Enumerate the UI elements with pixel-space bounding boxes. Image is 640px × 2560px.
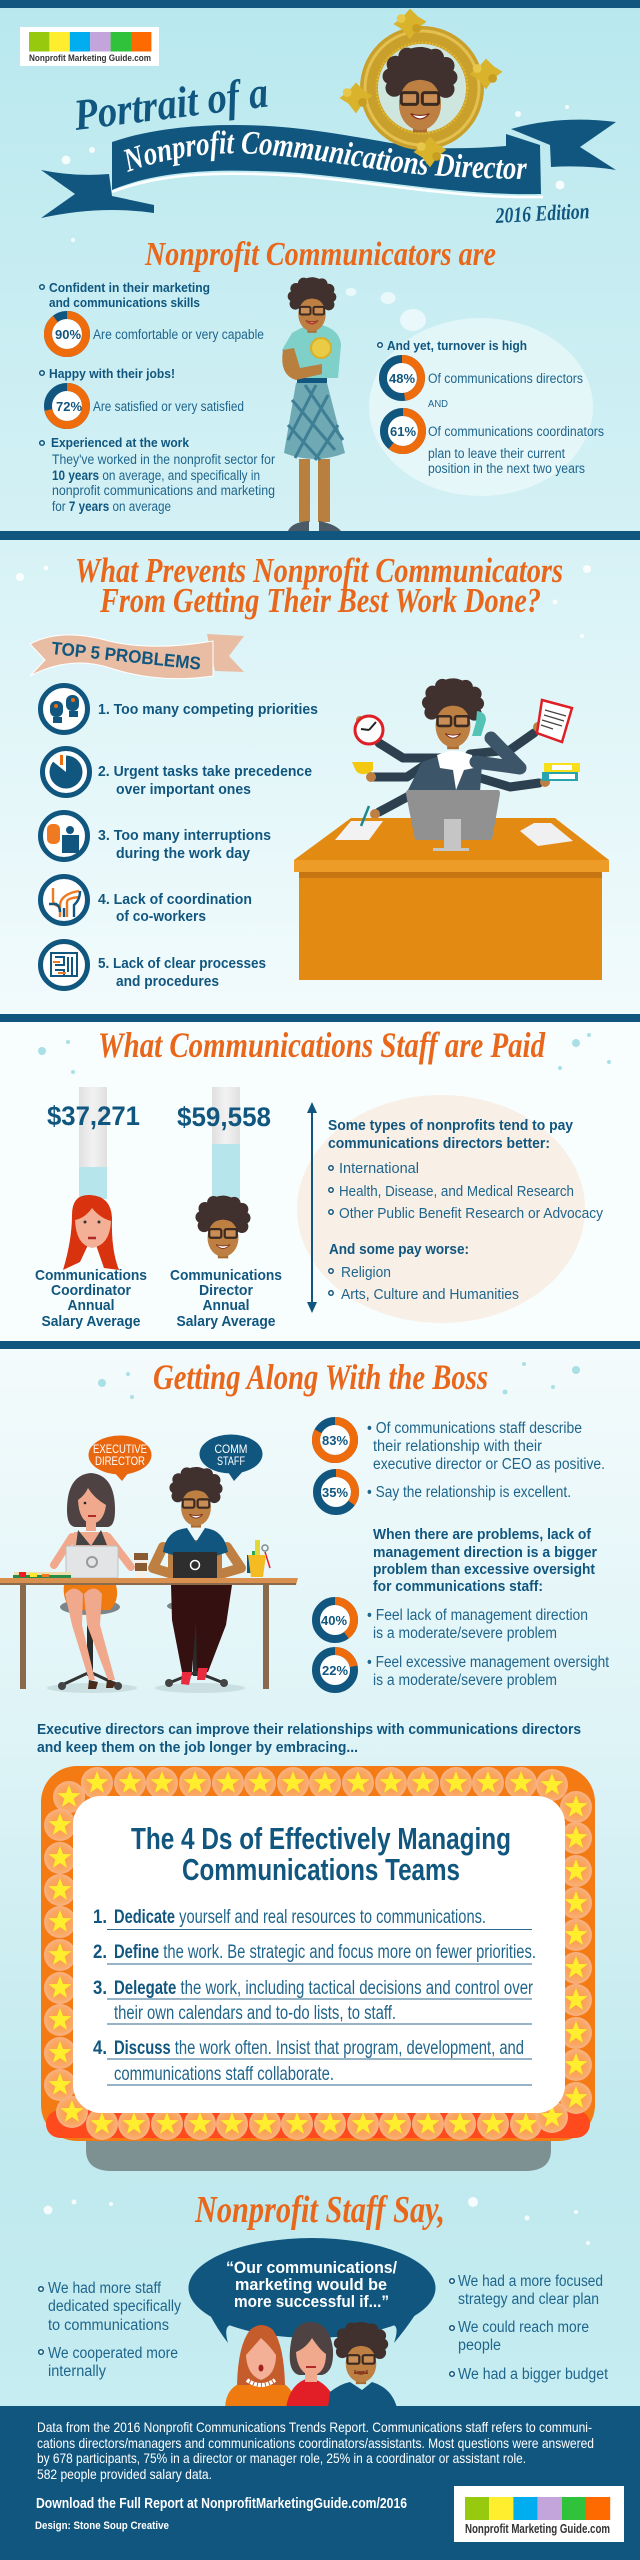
item 1: 1. — [93, 1907, 107, 1928]
problem 3: 3. Too many interruptions — [98, 828, 271, 844]
panel: pay by type: And some pay worse: — [329, 1242, 469, 1258]
donut 83%: 83% — [322, 1433, 348, 1448]
item 3: their own calendars and to-do lists, to staff. — [114, 2003, 396, 2024]
heading: staff say: Nonprofit Staff Say, — [194, 2189, 445, 2231]
icon: stop hand — [40, 812, 88, 860]
panel: experienced: Experienced at the work — [51, 435, 190, 450]
speech bubble: comm staff: STAFF — [217, 1454, 245, 1468]
table — [0, 1578, 298, 1585]
panel: relationship stats: • Feel lack of management direction — [367, 1607, 588, 1624]
icon: clock — [42, 748, 90, 796]
speech bubble: quote: “Our communications/ — [226, 2258, 397, 2277]
panel: relationship stats: • Say the relationship is excellent. — [367, 1484, 571, 1501]
problem 3 — [40, 812, 271, 862]
icon: arrows — [40, 876, 88, 924]
woman — [64, 1585, 117, 1610]
panel: confident: and communications skills — [49, 295, 200, 310]
donut 61% — [384, 412, 422, 450]
illustration: three staff — [225, 2322, 397, 2408]
item 4: communications staff collaborate. — [114, 2064, 334, 2085]
download link: Download the Full Report at NonprofitMarketingGuide.com/2016 — [36, 2496, 407, 2512]
text: left responses: We had more staff — [48, 2280, 162, 2297]
panel: experienced: 10 years on average, and specifically in — [52, 468, 260, 483]
donut 72% — [48, 387, 86, 425]
text: right responses: people — [458, 2337, 501, 2354]
item 1: Dedicate yourself and real resources to communications. — [114, 1907, 486, 1928]
panel: relationship stats: is a moderate/severe problem — [373, 1625, 557, 1642]
chart: coordinator salary — [35, 1087, 147, 1330]
chart: coordinator salary: Coordinator — [51, 1282, 131, 1299]
arrow — [307, 1102, 317, 1313]
chart: coordinator salary: Salary Average — [42, 1313, 140, 1330]
text: left responses — [39, 2280, 181, 2380]
panel: relationship stats: for communications staff: — [373, 1578, 543, 1595]
text: left responses: We cooperated more — [48, 2345, 178, 2362]
clock — [355, 716, 383, 744]
rules — [107, 1930, 532, 2085]
problem 5: 5. Lack of clear processes — [98, 956, 266, 972]
donut 35%: 35% — [322, 1485, 348, 1500]
item 4: 4. — [93, 2038, 107, 2059]
item 3: Delegate the work, including tactical decisions and control over — [114, 1978, 534, 1999]
panel: relationship stats: • Feel excessive management oversight — [367, 1654, 610, 1671]
marquee heading — [131, 1821, 511, 1887]
problem 5 — [40, 942, 266, 990]
panel: pay by type: International — [339, 1160, 419, 1177]
panel: experienced — [40, 435, 275, 514]
footnote: 582 people provided salary data. — [37, 2466, 212, 2482]
chart: coordinator salary: $37,271 — [47, 1101, 140, 1131]
donut 90%: 90% — [55, 327, 81, 342]
icon: maze — [40, 942, 88, 988]
donut 48%: 48% — [389, 371, 415, 386]
monitor — [406, 790, 500, 851]
portrait frame — [340, 9, 502, 167]
problem 2: over important ones — [116, 782, 251, 798]
panel: turnover: Of communications coordinators — [428, 424, 604, 439]
illustration: two people at desk — [0, 1467, 298, 1693]
illustration: multitasking director at desk — [294, 678, 609, 980]
text: right responses: strategy and clear plan — [458, 2291, 599, 2308]
panel: pay by type: Religion — [341, 1264, 391, 1281]
ribbon: top 5 problems: TOP 5 PROBLEMS — [51, 638, 202, 674]
panel: pay by type: Other Public Benefit Research or Advocacy — [339, 1205, 603, 1222]
panel: confident: Are comfortable or very capable — [93, 327, 264, 342]
donut 90% — [48, 315, 86, 353]
badge — [311, 338, 331, 358]
panel: confident: Confident in their marketing — [49, 280, 210, 295]
panel: relationship stats: problem than excessive oversight — [373, 1561, 595, 1578]
panel: relationship stats: • Of communications staff describe — [367, 1420, 582, 1437]
red-haired face — [63, 1195, 119, 1270]
item 2: Define the work. Be strategic and focus more on fewer priorities. — [114, 1942, 536, 1963]
panel: experienced: They've worked in the nonprofit sector for — [52, 452, 275, 467]
text: right responses: We could reach more — [458, 2319, 589, 2336]
panel: confident — [40, 280, 264, 353]
folders — [14, 1572, 71, 1575]
item 3: 3. — [93, 1978, 107, 1999]
text: left responses: to communications — [48, 2317, 169, 2334]
text: right responses — [450, 2273, 609, 2383]
donut 48% — [383, 359, 421, 397]
footnote — [37, 2419, 594, 2482]
donut 35% — [317, 1473, 355, 1511]
chart: coordinator salary: Communications — [35, 1267, 147, 1284]
panel: happy: Are satisfied or very satisfied — [93, 399, 244, 414]
logo: top — [20, 27, 159, 66]
ribbon: top 5 problems — [30, 634, 244, 679]
panel: experienced: nonprofit communications and marketing — [52, 483, 275, 498]
donut 40%: 40% — [321, 1613, 347, 1628]
text: left responses: internally — [48, 2363, 106, 2380]
panel: pay by type: Arts, Culture and Humanities — [341, 1286, 519, 1303]
donut 72%: 72% — [56, 399, 82, 414]
speech bubble: executive director: EXECUTIVE — [93, 1442, 147, 1456]
panel: turnover — [378, 338, 604, 476]
heading: paid: What Communications Staff are Paid — [98, 1025, 546, 1065]
phone — [472, 711, 486, 736]
donut 61%: 61% — [390, 424, 416, 439]
problem 3: during the work day — [116, 846, 250, 862]
panel: happy: Happy with their jobs! — [49, 366, 175, 381]
marquee heading: Communications Teams — [182, 1852, 460, 1887]
papers — [335, 821, 383, 840]
footnote: by 678 participants, 75% in a director or manager role, 25% in a coordinator or assistant role. — [37, 2450, 526, 2466]
man — [171, 1585, 232, 1672]
logo: top: Nonprofit Marketing Guide.com — [29, 53, 151, 64]
figure: standing woman — [282, 277, 345, 531]
item 4 — [93, 2038, 524, 2085]
panel: pay by type — [297, 1095, 603, 1323]
panel: relationship stats: their relationship with their — [373, 1438, 542, 1455]
heading: What Prevents — [75, 551, 563, 620]
panel: marquee shadow — [86, 2130, 551, 2171]
books — [542, 763, 580, 781]
thought bubbles — [346, 288, 593, 496]
panel: relationship stats: executive director or CEO as positive. — [373, 1456, 605, 1473]
back arms — [373, 733, 539, 812]
cup — [352, 762, 373, 774]
chart: coordinator salary: Annual — [68, 1297, 114, 1314]
icon: boxing gloves — [40, 686, 88, 732]
chart: director salary: $59,558 — [177, 1102, 271, 1132]
problem 2 — [42, 748, 312, 798]
text: left responses: dedicated specifically — [48, 2298, 181, 2315]
panel: turnover: Of communications directors — [428, 371, 583, 386]
heading: What Prevents: From Getting Their Best Work Done? — [99, 581, 541, 620]
item 2: 2. — [93, 1942, 107, 1963]
panel: happy — [40, 366, 244, 425]
panel: relationship stats: When there are problems, lack of — [373, 1526, 592, 1543]
problem 1 — [40, 686, 318, 732]
desk — [294, 818, 609, 980]
panel: pay by type: Health, Disease, and Medical Research — [339, 1183, 574, 1200]
speech bubble: quote: marketing would be — [235, 2275, 387, 2294]
chairs — [60, 1599, 120, 1615]
title: Portrait of a: Portrait of a — [70, 68, 271, 140]
problem 4: 4. Lack of coordination — [98, 892, 252, 908]
intro text: executive directors: Executive directors can improve their relationships with communications directors — [37, 1721, 581, 1738]
speech bubble: quote — [188, 2238, 436, 2343]
logo: footer — [454, 2486, 624, 2542]
pencil cup — [247, 1540, 270, 1577]
heading: Nonprofit Communicators are: Nonprofit Communicators are — [144, 236, 496, 273]
problem 1: 1. Too many competing priorities — [98, 702, 318, 718]
panel: relationship stats — [316, 1420, 610, 1689]
panel: relationship stats: management direction is a bigger — [373, 1544, 597, 1561]
donut 83% — [316, 1421, 354, 1459]
chart: director salary: Director — [199, 1282, 253, 1299]
intro text: executive directors — [37, 1721, 581, 1756]
donut 22% — [316, 1651, 354, 1689]
panel: relationship stats: is a moderate/severe problem — [373, 1672, 557, 1689]
panel: experienced: for 7 years on average — [52, 499, 171, 514]
banner ribbon — [41, 120, 616, 218]
chart: director salary — [170, 1087, 282, 1330]
clipboard — [537, 700, 572, 742]
coffee — [134, 1554, 148, 1578]
problem 4: of co-workers — [116, 909, 206, 925]
panel: marquee frame — [41, 1766, 595, 2141]
intro text: executive directors: and keep them on the job longer by embracing... — [37, 1739, 358, 1756]
speech bubble: comm staff — [200, 1434, 262, 1481]
laptops — [66, 1546, 118, 1578]
item 4: Discuss the work often. Insist that program, development, and — [114, 2038, 524, 2059]
marquee heading: The 4 Ds of Effectively Managing — [131, 1821, 511, 1856]
footer — [0, 2406, 640, 2560]
speech bubble: comm staff: COMM — [214, 1442, 248, 1456]
panel: turnover: plan to leave their current — [428, 446, 565, 461]
torso — [407, 754, 482, 792]
heading: boss: Getting Along With the Boss — [153, 1357, 488, 1397]
speech bubble: quote: more successful if...” — [234, 2292, 389, 2311]
text: right responses: We had a more focused — [458, 2273, 603, 2290]
chart: director salary: Communications — [170, 1267, 282, 1284]
problem 4 — [40, 876, 252, 925]
panel: turnover: And yet, turnover is high — [387, 338, 527, 353]
chart: director salary: Salary Average — [176, 1313, 276, 1330]
problem 2: 2. Urgent tasks take precedence — [98, 764, 312, 780]
panel: pay by type: Some types of nonprofits tend to pay — [328, 1118, 573, 1134]
donut 40% — [316, 1601, 354, 1639]
design credit: Design: Stone Soup Creative — [35, 2520, 169, 2532]
chart: director salary: Annual — [202, 1297, 250, 1314]
woman hair and face — [67, 1473, 115, 1527]
panel: turnover: AND — [428, 399, 448, 410]
item 3 — [93, 1978, 534, 2024]
panel: turnover: position in the next two years — [428, 461, 585, 476]
banner text: Nonprofit Communications Director — [124, 130, 527, 179]
edition: 2016 Edition — [494, 198, 590, 228]
speech bubble: executive director: DIRECTOR — [95, 1454, 145, 1468]
speech bubble: executive director — [88, 1436, 152, 1481]
problem 5: and procedures — [116, 974, 219, 990]
text: right responses: We had a bigger budget — [458, 2366, 609, 2383]
panel: pay by type: communications directors better: — [328, 1136, 550, 1152]
donut 22%: 22% — [322, 1663, 348, 1678]
